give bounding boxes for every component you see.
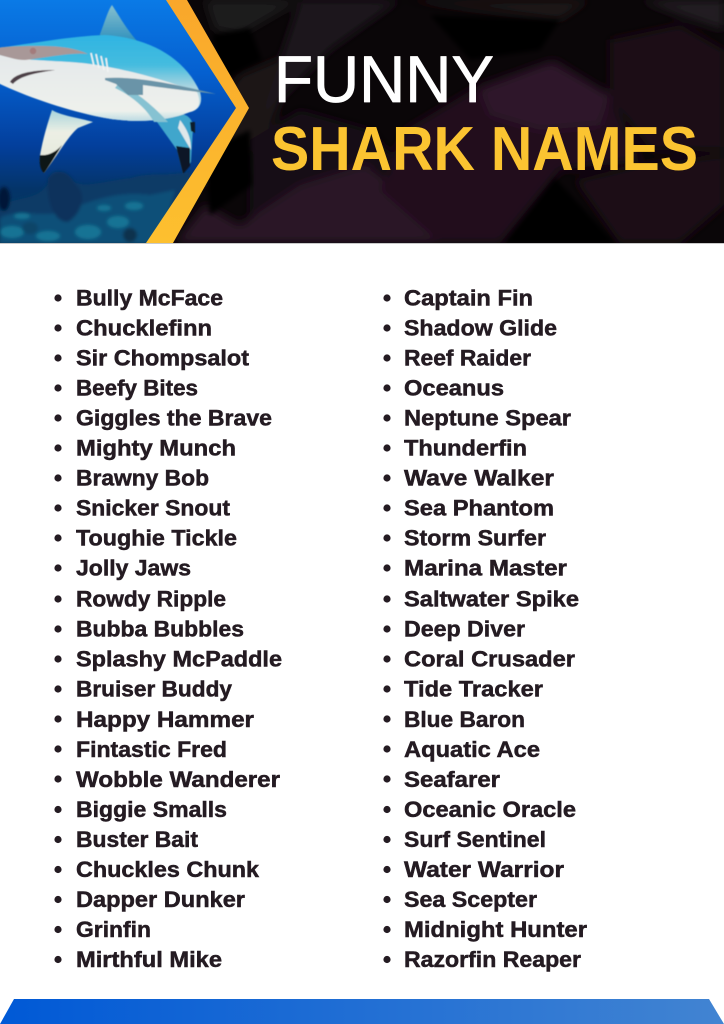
- gold chevron: [146, 0, 249, 243]
- name: Sea Scepter: [404, 887, 537, 912]
- name: Aquatic Ace: [404, 737, 540, 762]
- name: Sir Chompsalot: [76, 346, 250, 370]
- name: Blue Baron: [404, 707, 525, 732]
- name: Coral Crusader: [404, 646, 575, 672]
- blue footer bar: [0, 999, 724, 1024]
- name: Bully McFace: [76, 286, 223, 310]
- name: Thunderfin: [404, 436, 527, 460]
- pectoral fin: [105, 78, 216, 95]
- far pelvic fin: [157, 114, 193, 174]
- name: Beefy Bites: [76, 376, 198, 400]
- name: Snicker Snout: [76, 496, 231, 520]
- title line: SHARK NAMES: SHARK NAMES: [271, 115, 698, 184]
- name: Seafarer: [404, 767, 500, 792]
- title: [272, 56, 696, 170]
- name: Mirthful Mike: [76, 947, 222, 972]
- name: Sea Phantom: [404, 496, 554, 520]
- name: Brawny Bob: [76, 466, 209, 490]
- eye: [30, 48, 36, 54]
- name: Giggles the Brave: [76, 406, 272, 430]
- belly: [0, 54, 199, 121]
- header banner: [0, 0, 724, 243]
- name: Captain Fin: [404, 286, 533, 310]
- name: Mighty Munch: [76, 436, 236, 460]
- name: Tide Tracker: [404, 676, 543, 702]
- name: Midnight Hunter: [404, 917, 587, 942]
- mouth: [10, 70, 55, 84]
- name: Shadow Glide: [404, 316, 557, 340]
- name: Biggie Smalls: [76, 797, 227, 822]
- right name column: [383, 286, 587, 972]
- name: Deep Diver: [404, 616, 525, 642]
- name: Chucklefinn: [76, 316, 212, 340]
- dorsal fin: [100, 4, 136, 40]
- header bottom edge: [0, 243, 724, 244]
- name: Water Warrior: [404, 857, 564, 882]
- name: Oceanic Oracle: [404, 797, 576, 822]
- name: Wave Walker: [404, 466, 554, 490]
- name: Bubba Bubbles: [76, 616, 244, 642]
- name: Neptune Spear: [404, 406, 571, 430]
- front fin: [40, 110, 93, 173]
- left name column: [54, 286, 282, 972]
- gills: [91, 53, 108, 72]
- dark geometric background: [175, 0, 724, 243]
- coral reef: [0, 171, 190, 243]
- name: Grinfin: [76, 917, 151, 942]
- name: Oceanus: [404, 376, 504, 400]
- name: Happy Hammer: [76, 707, 254, 732]
- name: Marina Master: [404, 556, 567, 580]
- shark: [0, 5, 216, 174]
- name: Razorfin Reaper: [404, 947, 581, 972]
- black facets: [205, 15, 615, 243]
- body: [0, 35, 201, 121]
- name: Fintastic Fred: [76, 737, 227, 762]
- name: Jolly Jaws: [76, 556, 191, 580]
- name: Reef Raider: [404, 346, 531, 370]
- name: Bruiser Buddy: [76, 676, 233, 702]
- name: Surf Sentinel: [404, 827, 546, 852]
- name: Chuckles Chunk: [76, 857, 260, 882]
- shark photo panel: [0, 0, 250, 243]
- head stripe: [0, 46, 88, 60]
- name: Rowdy Ripple: [76, 586, 226, 612]
- name: Splashy McPaddle: [76, 646, 282, 672]
- name: Toughie Tickle: [76, 526, 237, 550]
- name: Wobble Wanderer: [76, 767, 280, 792]
- name: Storm Surfer: [404, 526, 546, 550]
- tail stripe: [115, 84, 168, 122]
- title line: FUNNY: FUNNY: [274, 42, 494, 116]
- name: Dapper Dunker: [76, 887, 245, 912]
- name: Buster Bait: [76, 827, 199, 852]
- name: Saltwater Spike: [404, 586, 579, 612]
